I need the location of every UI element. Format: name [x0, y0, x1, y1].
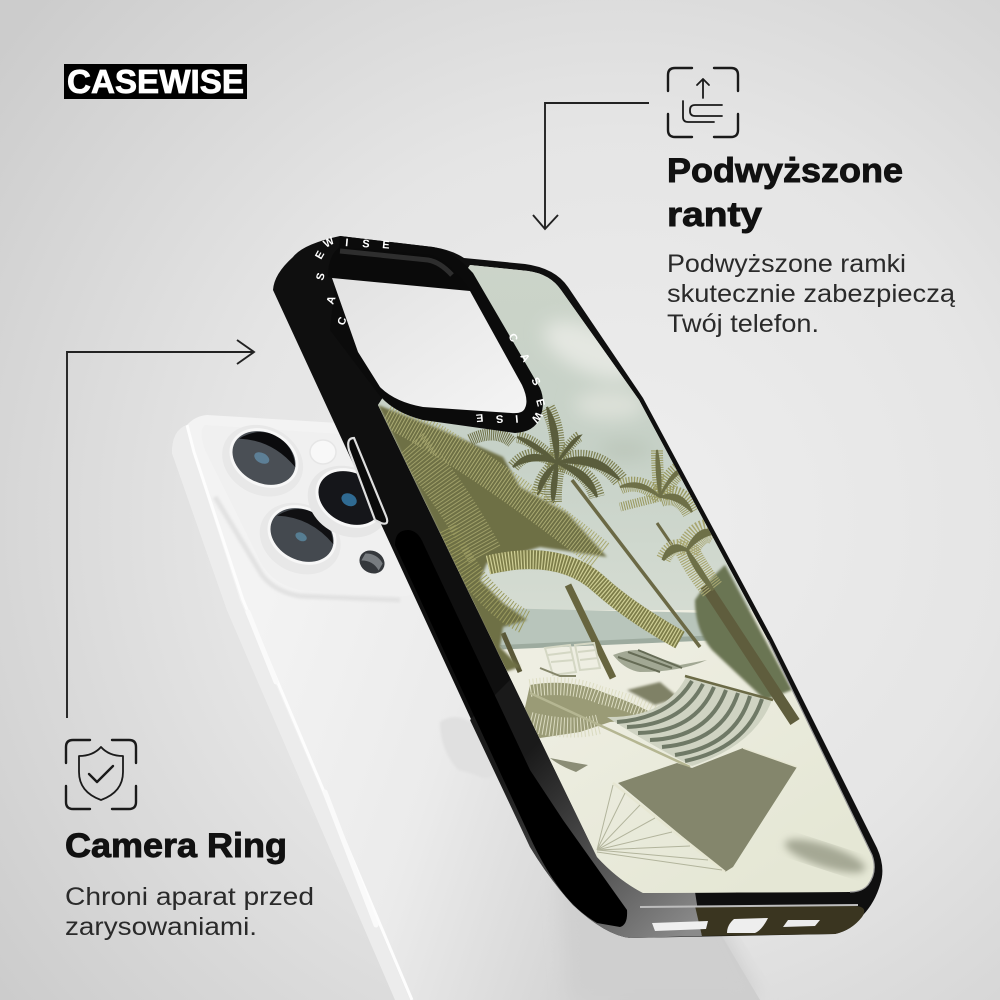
text: camera ring description: Chroni aparat przed: [65, 883, 314, 911]
lens large top: [210, 411, 315, 510]
ring lettering: C: [336, 315, 350, 327]
lens right: [295, 452, 401, 551]
right palm one: [620, 450, 692, 512]
heading: Podwyższone ranty: Podwyższone: [667, 152, 903, 190]
camera ring: [313, 235, 550, 433]
logo CASEWISE: CASEWISE: [67, 63, 244, 100]
sensor: [355, 546, 389, 578]
left palm trunk: [503, 633, 520, 672]
ring lettering: E: [475, 411, 484, 424]
ring lettering: S: [528, 376, 542, 388]
camera bump: [202, 425, 420, 596]
volume button on case: [348, 438, 387, 524]
thick right palm trunk: [705, 585, 795, 722]
sand: [496, 640, 846, 893]
text: raised edges description: Podwyższone ramki: [667, 250, 906, 278]
bush right: [695, 565, 792, 700]
ring lettering: I: [345, 237, 349, 249]
arrow: top callout to case edge: [533, 103, 649, 229]
chairs on beach: [545, 643, 600, 675]
ring lettering: I: [515, 412, 519, 424]
striped hammock: [607, 677, 772, 766]
heading: Camera Ring: Camera Ring: [65, 827, 287, 865]
ring lettering: A: [325, 294, 339, 306]
beach photo on case back: [370, 255, 890, 900]
sky and clouds: [378, 265, 752, 610]
translucent lower left band: [470, 680, 702, 938]
ring lettering: S: [362, 238, 370, 251]
ring lettering: E: [313, 249, 327, 262]
sea: [499, 608, 704, 650]
ring lettering: S: [495, 412, 504, 425]
thin palm trunk: [572, 480, 700, 647]
hammock rope shadow: [597, 785, 722, 870]
icon: raised edges: [668, 68, 738, 137]
hammock shadow on sand: [618, 748, 797, 872]
central palm trunk: [568, 585, 613, 678]
text: camera ring description: zarysowaniami.: [65, 913, 257, 941]
palm shadows on sand: [525, 682, 648, 738]
big left palm mass: [378, 405, 680, 672]
ring lettering: S: [314, 272, 328, 282]
bottom edge band: [695, 906, 864, 936]
hammock spreader line: [530, 693, 690, 767]
right palm two: [663, 530, 715, 590]
text: camera ring description: [65, 883, 314, 941]
ring inner wall: [328, 247, 471, 291]
heading: Podwyższone ranty: ranty: [667, 196, 762, 234]
case: black outer shell: [273, 236, 882, 938]
ring lettering: E: [533, 398, 547, 408]
far hammock: [613, 650, 707, 672]
ring lettering: A: [517, 352, 532, 364]
text: raised edges description: Twój telefon.: [667, 310, 819, 338]
text: raised edges description: [667, 250, 955, 338]
text: raised edges description: skutecznie zabezpieczą: [667, 280, 955, 308]
arrow: bottom callout to camera: [67, 340, 254, 718]
ring lettering: W: [528, 409, 544, 425]
apple logo: [440, 717, 496, 778]
side buttons: [248, 612, 276, 682]
white phone behind the case: [172, 411, 760, 1000]
ring lettering: C: [505, 332, 520, 344]
upper palm: [513, 407, 620, 503]
blurred shadow bottom right: [782, 835, 868, 877]
lens bottom: [247, 489, 353, 588]
heading: Podwyższone ranty: [667, 152, 903, 234]
screen gloss edge: [768, 640, 874, 892]
port holes: [652, 921, 708, 931]
ring lettering: E: [382, 239, 390, 252]
ring opening: [332, 278, 526, 413]
side slot: [395, 530, 627, 927]
icon: shield with check: [66, 740, 136, 809]
ring lettering: W: [322, 235, 337, 251]
flash: [310, 440, 336, 464]
